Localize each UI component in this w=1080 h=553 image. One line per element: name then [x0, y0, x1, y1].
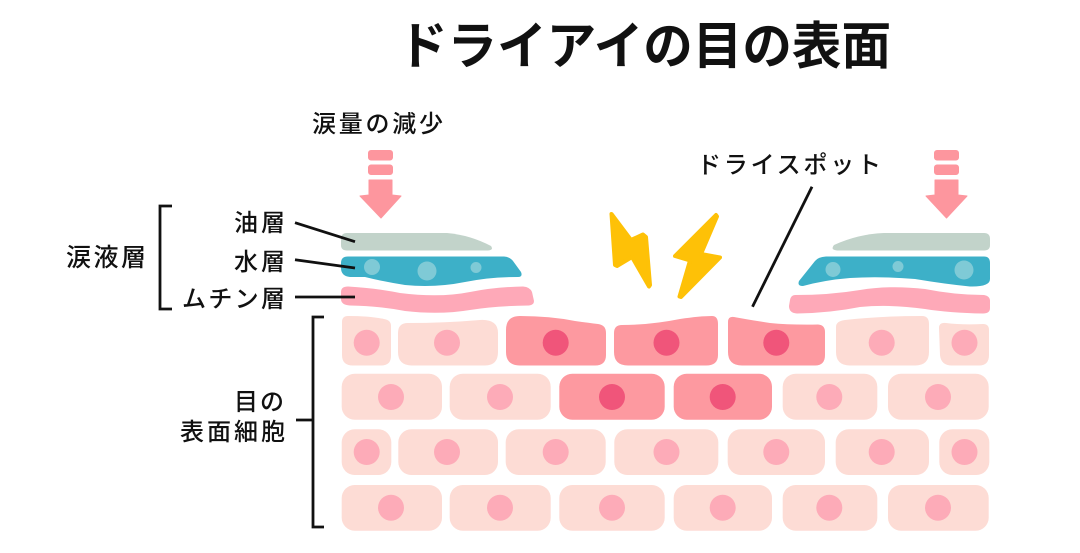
cell row 2: [342, 374, 989, 420]
cell row 1: [342, 316, 989, 366]
label: oil layer: 油層: [234, 210, 285, 237]
icon: right lightning bolt: [675, 215, 720, 297]
oil layer right: [833, 233, 990, 250]
water layer right: [798, 256, 990, 287]
water layer left: [341, 256, 522, 286]
leader line: water layer: [295, 260, 355, 268]
cell row 3: [342, 429, 989, 475]
bracket: surface cells: [296, 317, 324, 527]
leader line: mucin layer: [295, 296, 355, 298]
oil layer left: [341, 233, 492, 250]
left tear film layers: [341, 233, 534, 313]
label: mucin layer: ムチン層: [182, 286, 285, 313]
icon: right down arrow: [926, 150, 967, 218]
label: tear volume decrease: 涙量の減少: [312, 111, 443, 138]
leader line: dry spot: [752, 187, 812, 307]
label: tear film: 涙液層: [66, 244, 146, 272]
icon: left lightning bolt: [612, 214, 650, 286]
title: ドライアイの目の表面: [398, 18, 891, 75]
label: water layer: 水層: [234, 249, 285, 276]
mucin layer left: [341, 286, 534, 313]
right tear film layers: [789, 233, 990, 314]
label: eye surface cells line 2: 表面細胞: [180, 419, 285, 446]
icon: left down arrow: [360, 150, 401, 218]
mucin layer right: [789, 287, 990, 314]
cell row 4: [342, 485, 989, 531]
surface cells: [342, 316, 989, 531]
label: dry spot: ドライスポット: [697, 152, 881, 179]
leader line: oil layer: [295, 223, 355, 242]
bracket: tear film: [160, 206, 172, 309]
label: eye surface cells line 1: 目の: [234, 389, 284, 416]
